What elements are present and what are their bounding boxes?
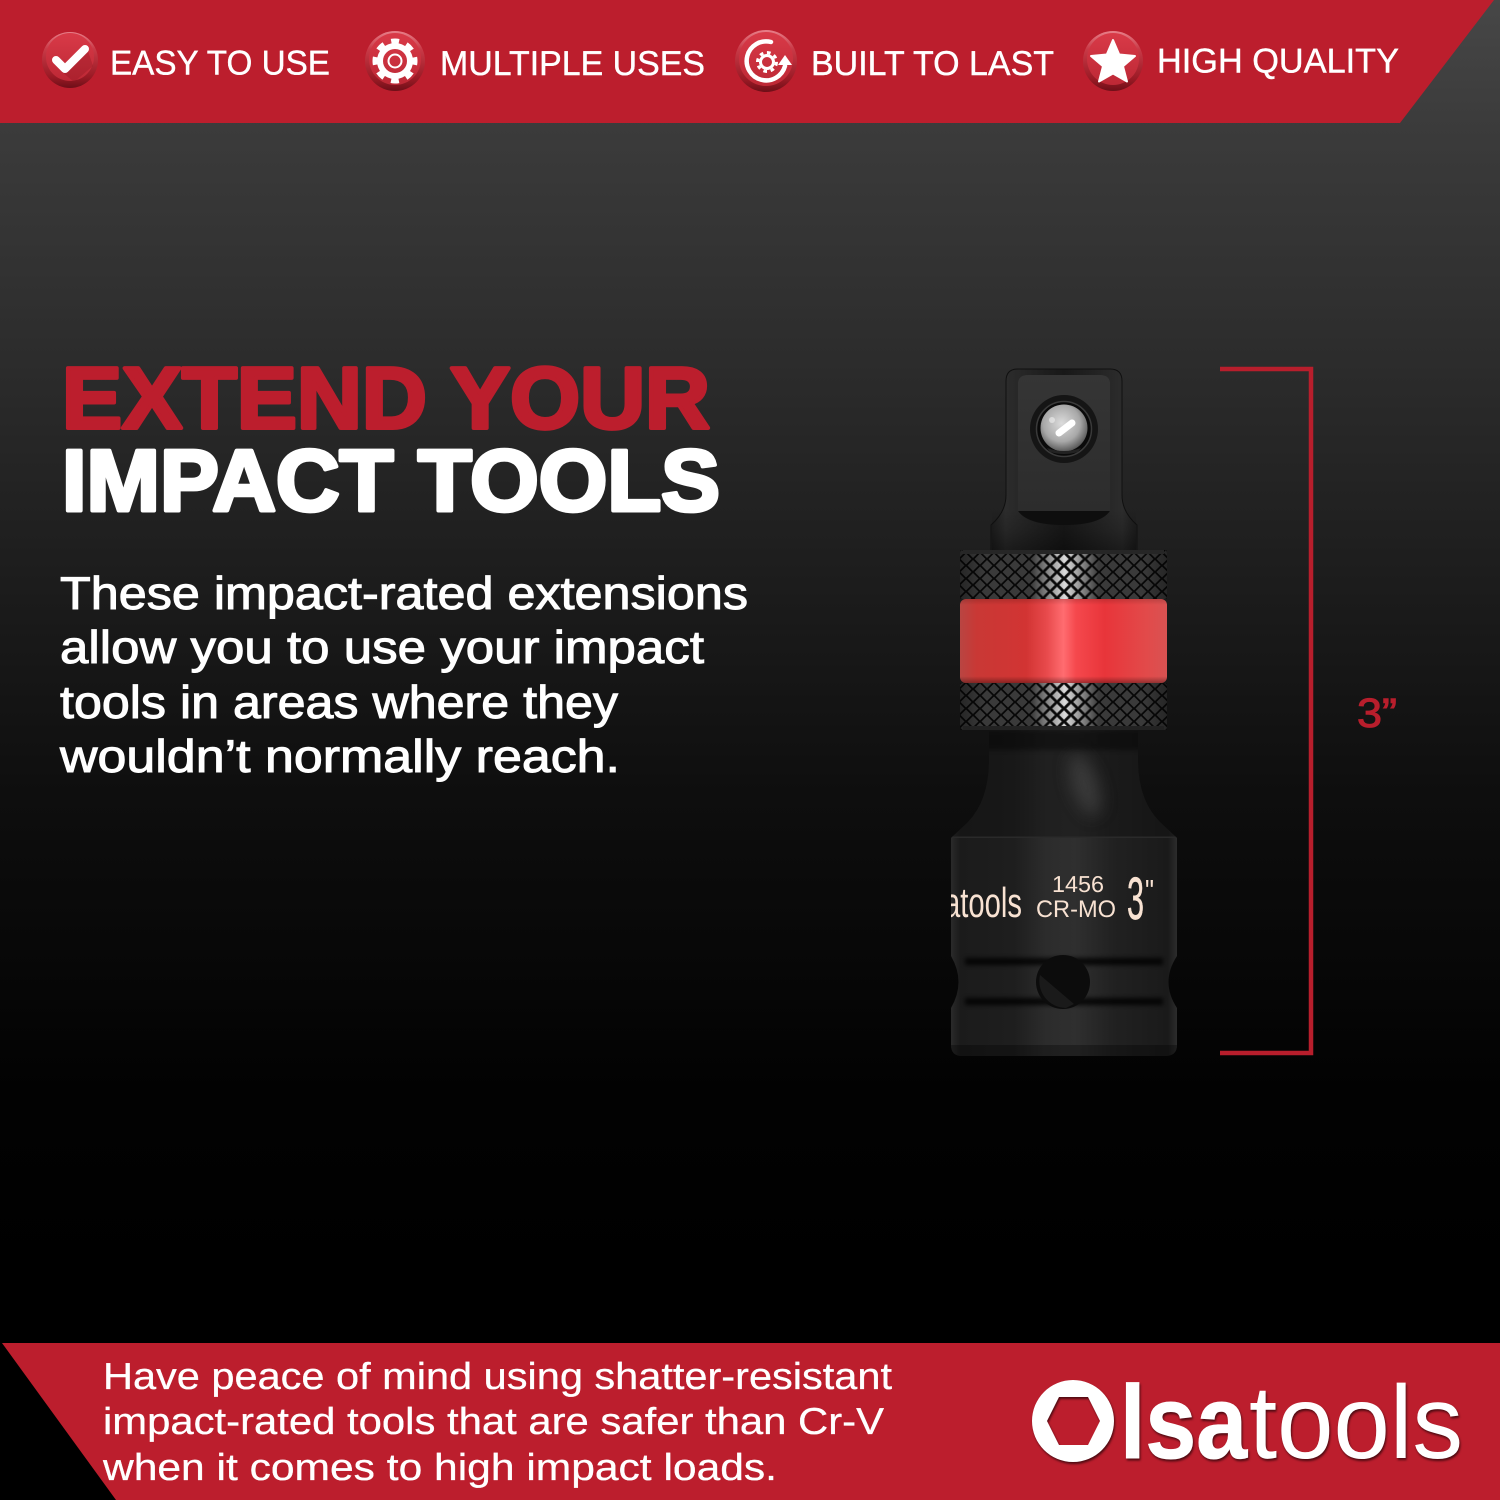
engraved markings: atools — [944, 879, 1022, 926]
body text: wouldn’t normally reach. — [59, 730, 620, 782]
product: impact extension tool — [944, 369, 1177, 1056]
logo word start: lsa — [1120, 1365, 1248, 1481]
square drive head — [991, 369, 1137, 552]
bottom red banner — [2, 1343, 1500, 1500]
lower body — [944, 730, 1177, 1056]
heading line: extend your: EXTEND YOUR — [62, 350, 710, 447]
logo mark: hexagon O — [1032, 1380, 1114, 1462]
dimension bracket — [1220, 369, 1311, 1053]
feature: multiple uses — [365, 31, 705, 91]
label: built to last: BUILT TO LAST — [811, 45, 1054, 83]
label: multiple uses: MULTIPLE USES — [440, 45, 705, 83]
label: easy to use: EASY TO USE — [110, 44, 330, 82]
icon: check badge — [42, 32, 98, 88]
body text — [59, 567, 748, 782]
engraved markings: " — [1145, 873, 1154, 909]
bottom text — [102, 1355, 893, 1488]
label: high quality: HIGH QUALITY — [1157, 42, 1399, 80]
retaining pin — [1036, 955, 1090, 1009]
dimension label: 3” — [1357, 690, 1397, 736]
body text: These impact-rated extensions — [60, 567, 748, 619]
icon: rotating gear badge — [735, 30, 797, 92]
engraved markings — [951, 876, 1153, 920]
engraved markings: CR-MO — [1036, 896, 1116, 923]
bottom text: impact-rated tools that are safer than Cr-V — [103, 1400, 884, 1442]
engraved markings: 1456 — [1052, 871, 1104, 897]
red band — [960, 599, 1167, 683]
logo word end: tools — [1249, 1365, 1463, 1481]
lower knurled ring — [960, 683, 1167, 730]
feature: easy to use — [42, 32, 330, 88]
upper knurled ring — [960, 550, 1167, 599]
feature: high quality — [1083, 31, 1399, 91]
feature: built to last — [735, 30, 1054, 92]
engraved markings: 3 — [1127, 865, 1144, 932]
heading line: impact tools: IMPACT TOOLS — [62, 432, 720, 530]
icon: gear badge — [365, 31, 425, 91]
body text: tools in areas where they — [60, 676, 618, 728]
bottom text: Have peace of mind using shatter-resistant — [103, 1355, 893, 1397]
icon: star badge — [1083, 31, 1143, 91]
body text: allow you to use your impact — [60, 621, 704, 673]
heading — [62, 350, 720, 530]
top red banner — [0, 0, 1494, 123]
detent ball — [1030, 395, 1098, 463]
bottom text: when it comes to high impact loads. — [102, 1446, 777, 1488]
logo: Olsatools — [1032, 1365, 1463, 1481]
